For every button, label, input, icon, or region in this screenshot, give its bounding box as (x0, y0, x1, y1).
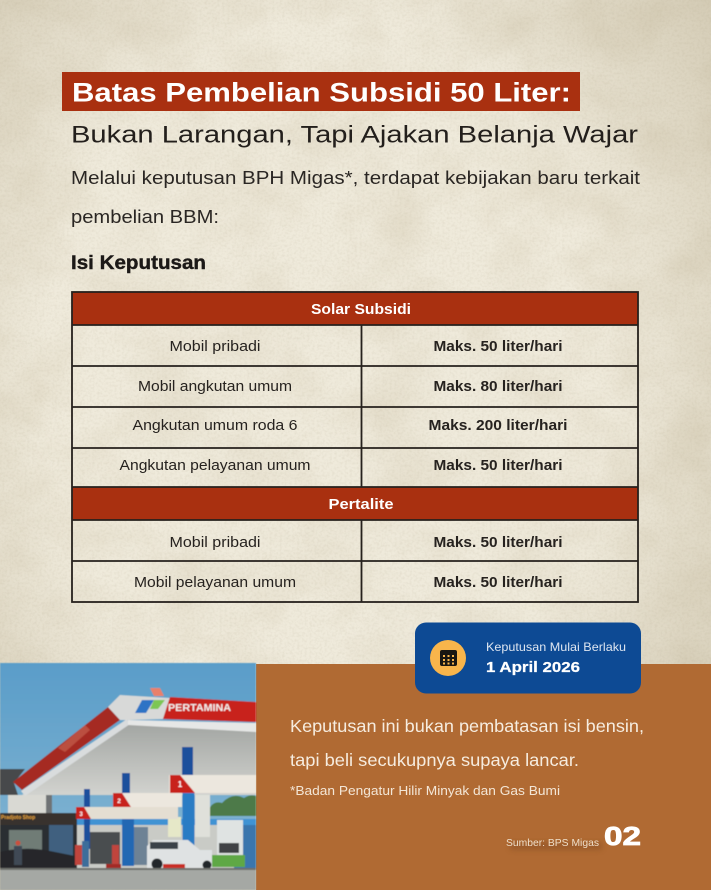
canopy underside (22, 724, 256, 795)
red barrier (163, 864, 185, 869)
table header: Solar Subsidi (72, 292, 638, 325)
photo: Pertamina station: 3 (79, 812, 83, 818)
table header: Solar Subsidi: Solar Subsidi (311, 302, 411, 318)
purchase limits: Maks. 50 liter/hari (434, 339, 562, 355)
icon: calendar (430, 640, 466, 676)
purchase limits: Maks. 80 liter/hari (434, 379, 562, 395)
table (72, 292, 638, 602)
source and page number: 02 (604, 821, 641, 851)
footer statement (290, 716, 644, 770)
purchase limits: Maks. 50 liter/hari (434, 575, 562, 591)
pump signs (169, 775, 256, 793)
photo: Pertamina station: 1 (178, 780, 183, 789)
photo: Pertamina station (0, 663, 256, 890)
date badge: Keputusan Mulai Berlaku (486, 640, 626, 654)
vehicle labels: Mobil pelayanan umum (134, 575, 296, 591)
vehicle labels: Angkutan umum roda 6 (132, 418, 298, 434)
photo: Pertamina station: Pradjoto Shop (1, 815, 35, 821)
table header: Pertalite: Pertalite (328, 497, 394, 513)
white panel (195, 793, 210, 837)
footnote: *Badan Pengatur Hilir Minyak dan Gas Bumi (290, 783, 560, 798)
purchase limits: Maks. 50 liter/hari (434, 535, 562, 551)
table header: Pertalite (72, 487, 638, 520)
vehicle labels (120, 339, 310, 591)
source and page number: Sumber: BPS Migas (506, 837, 599, 849)
forecourt (0, 868, 256, 890)
source and page number (506, 821, 641, 851)
section heading: Isi Keputusan (71, 252, 206, 274)
vehicle labels: Mobil pribadi (170, 535, 260, 551)
vehicle labels: Angkutan pelayanan umum (120, 458, 310, 474)
title highlight (62, 72, 580, 111)
vehicle labels: Mobil pribadi (170, 339, 260, 355)
car (147, 840, 212, 868)
motorcycles (0, 849, 75, 869)
canopy left fascia (13, 707, 120, 790)
photo: Pertamina station: PERTAMINA (168, 702, 231, 714)
brown footer panel (256, 664, 711, 890)
title highlight: Batas Pembelian Subsidi 50 Liter: (72, 78, 571, 108)
vehicle labels: Mobil angkutan umum (138, 379, 292, 395)
intro text (71, 168, 640, 227)
canopy red brand band (163, 697, 256, 722)
canopy top silver (108, 695, 170, 720)
left background building (0, 769, 25, 795)
intro text: pembelian BBM: (71, 207, 219, 227)
logo (135, 700, 154, 713)
station building (0, 813, 77, 825)
purchase limits: Maks. 50 liter/hari (434, 458, 562, 474)
columns (182, 747, 193, 793)
fuel pump (217, 820, 243, 856)
footer statement: tapi beli secukupnya supaya lancar. (290, 750, 579, 770)
palm trees (208, 795, 256, 816)
date badge (415, 622, 641, 694)
footer statement: Keputusan ini bukan pembatasan isi bensin, (290, 716, 644, 736)
photo: Pertamina station: 2 (117, 798, 121, 805)
purchase limits (428, 339, 568, 591)
intro text: Melalui keputusan BPH Migas*, terdapat kebijakan baru terkait (71, 168, 640, 188)
date badge: 1 April 2026 (486, 659, 580, 676)
subtitle: Bukan Larangan, Tapi Ajakan Belanja Wajar (71, 122, 638, 148)
purchase limits: Maks. 200 liter/hari (428, 418, 568, 434)
